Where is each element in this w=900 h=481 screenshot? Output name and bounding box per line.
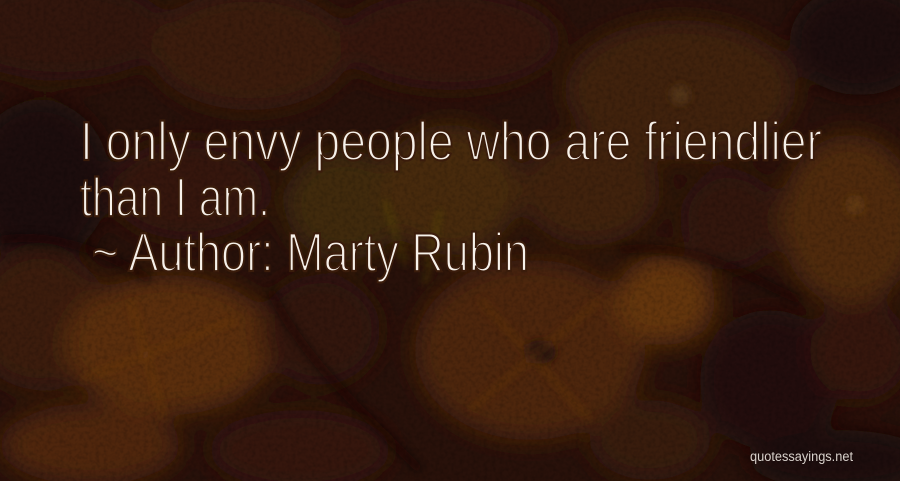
author line: ~ Author: Marty Rubin (92, 221, 529, 283)
watermark: quotessayings.net (750, 449, 853, 464)
quote line 2: than I am. (80, 166, 270, 228)
